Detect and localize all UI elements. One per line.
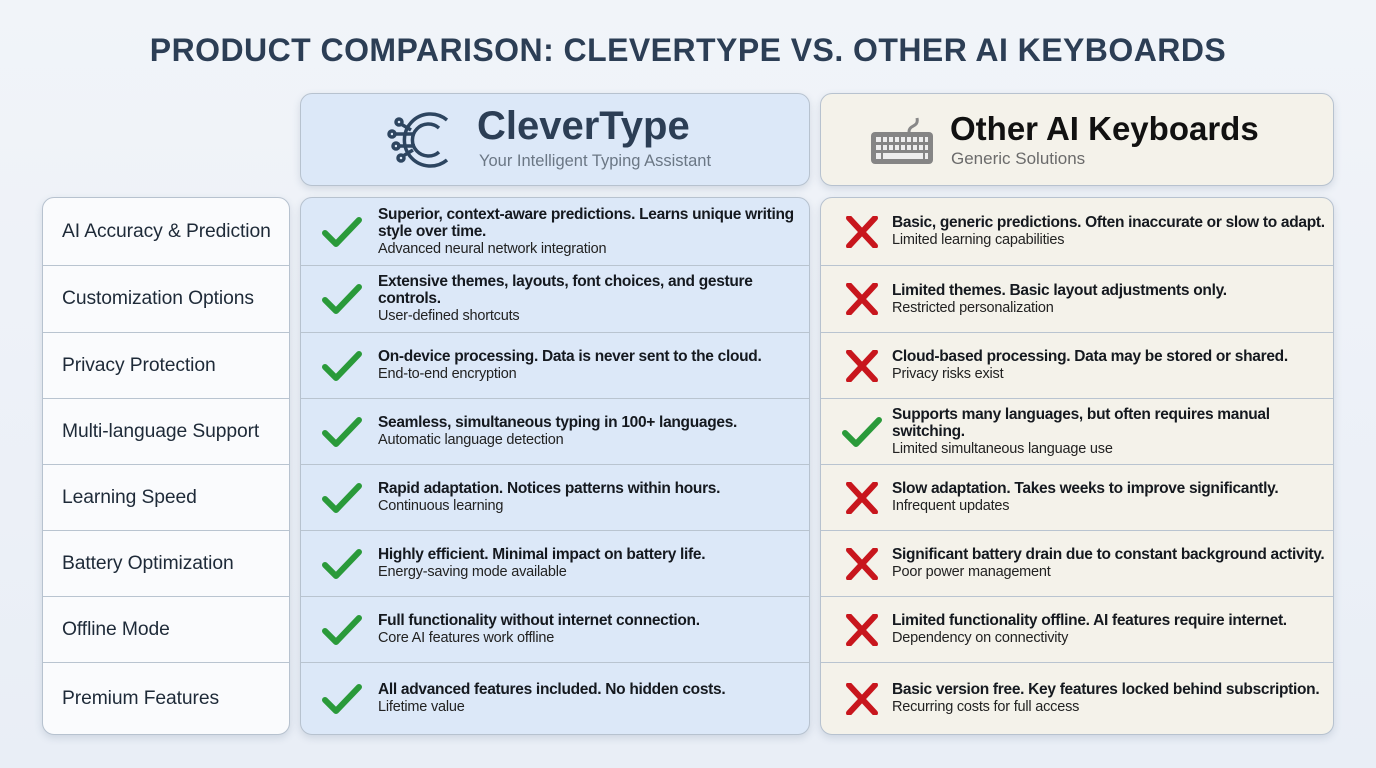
panel: CleverType features: [300, 197, 810, 735]
heading: CleverType: CleverType: [477, 104, 690, 148]
panel: CleverType features: On-device processing. Data is never sent to the cloud.: [378, 348, 761, 365]
panel: CleverType features: Core AI features work offline: [378, 630, 554, 646]
header: CleverType: [300, 93, 810, 186]
heading: Other AI Keyboards: [950, 110, 1259, 147]
panel: CleverType features: Full functionality without internet connection.: [378, 612, 700, 629]
panel: CleverType features: Highly efficient. Minimal impact on battery life.: [378, 546, 705, 563]
panel: Other AI Keyboards features: Slow adaptation. Takes weeks to improve significantly.: [892, 480, 1278, 497]
panel: feature labels: Battery Optimization: [62, 552, 234, 574]
panel: Other AI Keyboards features: Recurring costs for full access: [892, 699, 1079, 715]
panel: feature labels: Learning Speed: [62, 486, 197, 508]
panel: feature labels: Multi-language Support: [62, 420, 259, 442]
title: PRODUCT COMPARISON: CLEVERTYPE VS. OTHER AI KEYBOARDS: [150, 32, 1226, 68]
panel: Other AI Keyboards features: Restricted personalization: [892, 300, 1054, 316]
panel: Other AI Keyboards features: Poor power management: [892, 564, 1051, 580]
subtitle: Generic Solutions: [951, 149, 1085, 168]
panel: CleverType features: All advanced features included. No hidden costs.: [378, 681, 725, 698]
panel: feature labels: Privacy Protection: [62, 354, 216, 376]
icon: circuit C logo: [387, 112, 448, 168]
panel: Other AI Keyboards features: Limited simultaneous language use: [892, 440, 1113, 456]
panel: CleverType features: Superior, context-aware predictions. Learns unique writing style over time.: [378, 206, 794, 240]
panel: CleverType features: Rapid adaptation. Notices patterns within hours.: [378, 480, 720, 497]
panel: Other AI Keyboards features: Significant battery drain due to constant background activity.: [892, 546, 1324, 563]
panel: CleverType features: End-to-end encryption: [378, 366, 516, 382]
panel: Other AI Keyboards features: [820, 197, 1334, 735]
panel: Other AI Keyboards features: Dependency on connectivity: [892, 630, 1068, 646]
panel: CleverType features: User-defined shortcuts: [378, 308, 519, 324]
panel: CleverType features: Automatic language detection: [378, 432, 563, 448]
panel: feature labels: Offline Mode: [62, 618, 170, 640]
header: Other AI Keyboards: [820, 93, 1334, 186]
panel: Other AI Keyboards features: Supports many languages, but often requires manual switching.: [892, 406, 1270, 440]
panel: feature labels: [42, 197, 290, 735]
panel: CleverType features: Energy-saving mode available: [378, 564, 567, 580]
panel: Other AI Keyboards features: Cloud-based processing. Data may be stored or shared.: [892, 348, 1288, 365]
panel: Other AI Keyboards features: Limited learning capabilities: [892, 232, 1064, 248]
subtitle: Your Intelligent Typing Assistant: [479, 152, 711, 170]
panel: Other AI Keyboards features: Basic version free. Key features locked behind subscription.: [892, 681, 1319, 698]
panel: Other AI Keyboards features: Infrequent updates: [892, 498, 1009, 514]
panel: CleverType features: Extensive themes, layouts, font choices, and gesture controls.: [378, 273, 753, 307]
panel: CleverType features: Lifetime value: [378, 699, 465, 715]
panel: Other AI Keyboards features: Privacy risks exist: [892, 366, 1003, 382]
panel: Other AI Keyboards features: Limited functionality offline. AI features require internet.: [892, 612, 1287, 629]
panel: CleverType features: Advanced neural network integration: [378, 240, 606, 256]
panel: CleverType features: Continuous learning: [378, 498, 503, 514]
panel: CleverType features: Seamless, simultaneous typing in 100+ languages.: [378, 414, 737, 431]
icon: keyboard: [871, 118, 933, 164]
panel: feature labels: Premium Features: [62, 688, 219, 708]
panel: Other AI Keyboards features: Basic, generic predictions. Often inaccurate or slow to adapt.: [892, 214, 1325, 231]
panel: Other AI Keyboards features: Limited themes. Basic layout adjustments only.: [892, 282, 1227, 298]
panel: feature labels: AI Accuracy & Prediction: [62, 220, 271, 242]
panel: feature labels: Customization Options: [62, 288, 254, 309]
